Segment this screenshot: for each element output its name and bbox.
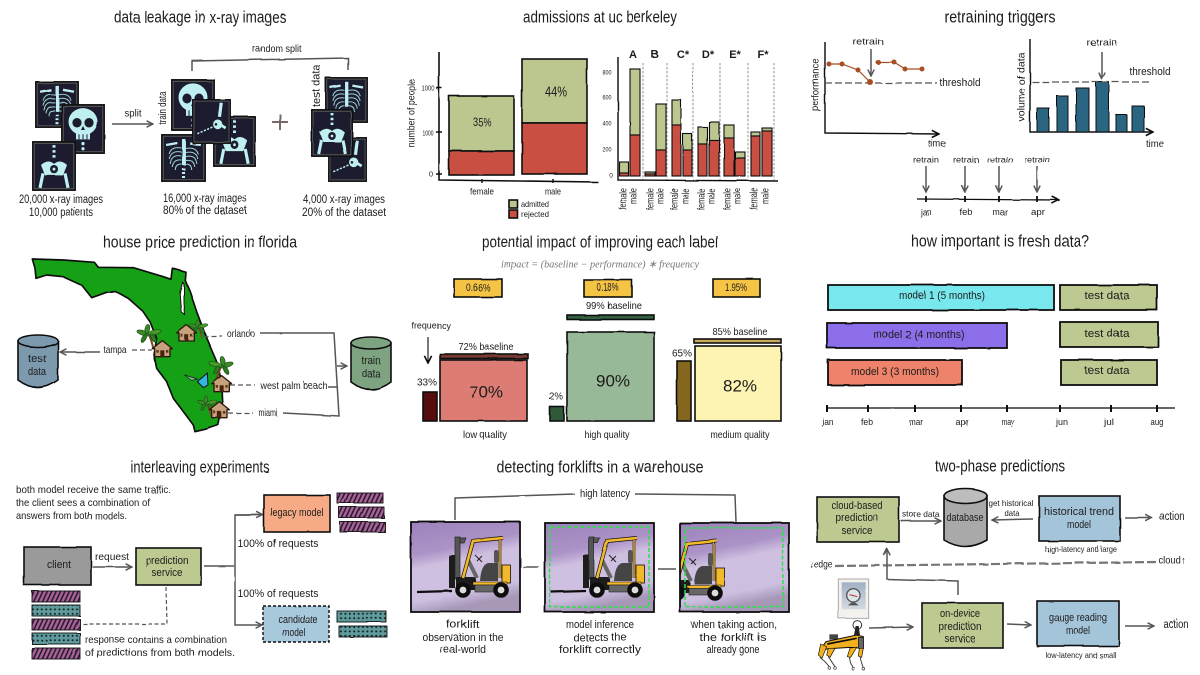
bracket: high latency — [455, 488, 736, 522]
caption: action: the forklift is — [700, 632, 767, 644]
divider: edge and cloud: cloud↑ — [1158, 556, 1186, 566]
chart: overall admissions: number of people — [406, 78, 418, 148]
bracket: random split: random split — [252, 43, 302, 55]
arrows to models — [204, 515, 263, 625]
timeline: scheduled retraining: retrain — [913, 156, 939, 164]
frame: model inference — [545, 523, 654, 612]
label: requests upper: 100% of requests — [238, 538, 319, 550]
cylinder: test data — [18, 335, 58, 388]
box: on-device service: service — [944, 633, 976, 645]
bar: model 3 — [828, 360, 962, 385]
group: medium quality: 1.95% — [725, 282, 747, 294]
cylinder: database: database — [946, 512, 984, 524]
panel: retraining triggers — [810, 8, 1170, 217]
group: low quality: low quality — [463, 429, 508, 441]
chart: data volume threshold: time — [1146, 138, 1164, 150]
label: train data: train data — [157, 91, 169, 124]
timeline: scheduled retraining: retrain — [953, 156, 979, 164]
chart: performance threshold: threshold — [940, 77, 980, 89]
caption: dataset size: 10,000 patients — [29, 207, 93, 219]
box: legacy model — [264, 495, 330, 532]
response text — [85, 634, 235, 659]
caption: observation: forklift — [446, 619, 480, 631]
panel: how important is fresh data — [822, 232, 1175, 427]
divider: edge and cloud — [810, 556, 1186, 570]
box: cloud-based service: cloud-based — [832, 500, 882, 512]
chart: admissions per department: male — [760, 188, 772, 204]
description: the client sees a combination of — [16, 497, 150, 509]
bar: test data 3: test data — [1084, 365, 1130, 377]
chart: overall admissions: female — [470, 186, 494, 198]
chart: admissions per department: male — [680, 188, 692, 204]
panel: admissions at uc berkeley — [406, 8, 778, 219]
chart: overall admissions: 0 — [429, 170, 433, 178]
title: forklifts: detecting forklifts in a warehouse — [496, 458, 704, 476]
chart: admissions per department: 200 — [602, 146, 612, 154]
timeline: months: jun — [1055, 417, 1068, 427]
bar: model 1: model 1 (5 months) — [899, 290, 985, 302]
chart: overall admissions: male — [545, 186, 561, 198]
legend: rejected — [521, 209, 549, 219]
title: house price: house price prediction in florida — [103, 232, 297, 252]
chart: performance threshold: retrain — [852, 36, 884, 48]
timeline: scheduled retraining: mar — [992, 207, 1008, 217]
group: high quality: 90% — [596, 372, 630, 390]
chart: admissions per department: male — [732, 188, 744, 204]
caption: test size — [302, 194, 387, 219]
title: admissions: admissions at uc berkeley — [523, 8, 677, 26]
cylinder: train data — [351, 337, 391, 390]
arrow: request — [93, 551, 132, 567]
arrow: split: split — [124, 108, 142, 120]
arrow: action lower — [1125, 619, 1188, 631]
panel: potential impact of improving each label — [412, 232, 781, 441]
frame: forklift gone — [678, 522, 790, 614]
arrow: service to gauge model — [1007, 624, 1031, 625]
chart: data volume threshold: retrain — [1086, 38, 1118, 48]
group: high quality: high quality — [584, 429, 630, 441]
timeline: scheduled retraining: retrain — [987, 156, 1013, 164]
box: gauge reading model — [1037, 601, 1119, 646]
description: both model receive the same traffic. — [16, 484, 171, 496]
timeline: scheduled retraining: feb — [960, 207, 972, 217]
chart: admissions per department: female — [670, 188, 680, 210]
box: historical trend model: historical trend — [1044, 506, 1114, 518]
chart: admissions per department: 800 — [602, 70, 612, 76]
chart: admissions per department: D* — [702, 49, 715, 61]
box: candidate model — [263, 606, 329, 642]
group: low quality: 72% baseline — [458, 341, 514, 353]
description — [16, 484, 171, 522]
combined predictions — [32, 591, 80, 659]
arrow: action upper: action — [1160, 511, 1184, 523]
caption: inference — [559, 619, 642, 656]
caption: low-latency: low-latency and small — [1046, 650, 1117, 660]
chart: performance threshold: time — [928, 138, 946, 150]
chart: admissions per department: F* — [758, 49, 769, 61]
chart: admissions per department: 600 — [602, 94, 612, 102]
timeline: months: jan — [822, 417, 834, 427]
cylinder: test data: test — [28, 353, 46, 365]
legend — [509, 199, 549, 219]
title: retraining triggers: retraining triggers — [944, 8, 1056, 26]
caption: inference: forklift correctly — [559, 644, 642, 656]
group: medium quality: medium quality — [710, 429, 770, 441]
panel: data leakage in x-ray images — [19, 8, 387, 219]
box: cloud-based service: service — [842, 525, 872, 537]
formula: impact = (baseline − performance) ∗ frequency — [501, 260, 699, 270]
candidate predictions — [337, 611, 387, 637]
chart: admissions per department: female — [750, 188, 760, 210]
timeline: scheduled retraining: apr — [1031, 207, 1045, 217]
arrow: get historical data: data — [1004, 508, 1020, 518]
panel: interleaving experiments — [16, 458, 387, 659]
box: gauge reading model: model — [1066, 625, 1090, 637]
cylinder: test data: data — [28, 366, 47, 378]
timeline: scheduled retraining: retrain — [1024, 156, 1050, 164]
chart: admissions per department: male — [628, 188, 640, 204]
label: miami — [228, 407, 278, 419]
caption: train size — [163, 193, 248, 217]
chart: overall admissions: 1000 — [422, 128, 434, 138]
divider: edge and cloud: ↓edge — [810, 560, 833, 570]
group: high quality: 99% baseline — [586, 300, 642, 312]
group: low quality: 33% — [417, 378, 437, 388]
chart: performance threshold: performance — [810, 58, 822, 112]
caption: observation: real-world — [440, 644, 486, 656]
caption: action — [690, 619, 777, 656]
chart: admissions per department: female — [618, 188, 630, 210]
bar: test data 1 — [1060, 285, 1157, 310]
box: client: client — [47, 559, 71, 571]
bar: model 2: model 2 (4 months) — [874, 329, 964, 341]
box: legacy model: legacy model — [270, 507, 324, 519]
chart: admissions per department: male — [706, 188, 718, 204]
timeline: months: may — [1002, 417, 1015, 427]
caption: test size: 20% of the dataset — [302, 207, 387, 219]
caption: action: when taking action, — [690, 619, 777, 631]
box: cloud-based service: prediction — [836, 512, 878, 524]
group: high quality: 2% — [549, 392, 563, 402]
caption: train size: 80% of the dataset — [163, 205, 248, 217]
icon: full dataset x-rays — [33, 82, 104, 190]
chart: admissions per department: female — [722, 188, 734, 210]
box: prediction service: prediction — [146, 555, 188, 567]
cylinder: train data: data — [362, 368, 381, 380]
panel: house price prediction in florida — [18, 232, 391, 432]
group: low quality: 70% — [469, 382, 503, 402]
timeline: scheduled retraining — [913, 156, 1059, 217]
caption: high-latency: high-latency and large — [1045, 544, 1117, 554]
caption: train size: 16,000 x-ray images — [163, 193, 247, 205]
title: fresh data: how important is fresh data? — [911, 232, 1089, 250]
timeline: scheduled retraining: jan — [920, 207, 932, 217]
arrow: edge to cloud — [887, 549, 958, 595]
box: on-device service: prediction — [938, 621, 982, 633]
icon: robot dog — [818, 621, 865, 670]
map: florida with houses — [32, 259, 234, 432]
icon: test x-rays — [312, 78, 367, 181]
connectors between frames — [523, 567, 676, 569]
arrow: robot to service — [869, 627, 913, 628]
box: prediction service: service — [152, 567, 182, 579]
box: historical trend model: model — [1067, 519, 1091, 531]
group: medium quality: 82% — [723, 376, 757, 396]
box: prediction service — [136, 548, 201, 585]
plus sign — [272, 114, 288, 130]
timeline: months: jul — [1103, 417, 1114, 427]
legacy predictions — [337, 493, 385, 532]
chart: admissions per department: female — [696, 188, 708, 210]
cylinder: train data: train — [362, 355, 380, 367]
caption: observation — [422, 619, 504, 656]
caption: inference: model inference — [566, 619, 634, 631]
timeline: months: apr — [956, 417, 968, 427]
bar: model 1 — [828, 285, 1054, 310]
box: client — [24, 547, 91, 585]
response text: response contains a combination — [85, 634, 227, 646]
chart: data volume threshold: threshold — [1130, 66, 1170, 78]
caption: action: already gone — [706, 644, 760, 656]
label: west palm beach: west palm beach — [260, 380, 328, 392]
box: gauge reading model: gauge reading — [1049, 612, 1107, 624]
icon: gauge photo — [838, 579, 869, 618]
frame: forklift observed — [411, 522, 520, 612]
chart: admissions per department: B — [651, 49, 659, 61]
chart: overall admissions: 35% — [473, 115, 491, 129]
chart: performance threshold — [810, 36, 980, 150]
bar: test data 2: test data — [1084, 328, 1130, 340]
bracket: random split — [192, 43, 348, 71]
chart: admissions per department: male — [656, 188, 666, 204]
group: high quality — [549, 280, 654, 441]
group: medium quality: 65% — [672, 348, 692, 360]
group: low quality — [412, 279, 528, 441]
box: candidate model: candidate — [278, 614, 318, 626]
label: test data: test data — [311, 64, 323, 107]
label: orlando: orlando — [227, 328, 255, 340]
box: on-device service: on-device — [940, 608, 980, 620]
caption: dataset size — [19, 194, 103, 219]
label: orlando — [203, 328, 255, 340]
response text: of predictions from both models. — [85, 647, 235, 659]
group: high quality: 0.18% — [597, 282, 619, 294]
group: low quality: 0.66% — [466, 282, 490, 294]
title: data leakage: data leakage in x-ray images — [114, 8, 286, 26]
box: cloud-based service — [817, 497, 899, 542]
chart: admissions per department — [602, 49, 778, 210]
chart: data volume threshold: volume of data — [1016, 52, 1028, 122]
icon: train x-rays — [162, 80, 255, 181]
chart: overall admissions: 1000 — [422, 84, 434, 92]
title: two-phase: two-phase predictions — [935, 456, 1065, 476]
legend: admitted — [521, 199, 549, 209]
chart: overall admissions: 44% — [545, 84, 567, 100]
chart: admissions per department: 0 — [609, 172, 613, 180]
timeline: months — [822, 405, 1175, 427]
caption: dataset size: 20,000 x-ray images — [19, 194, 103, 206]
label: west palm beach — [230, 380, 328, 392]
chart: admissions per department: 400 — [602, 120, 612, 128]
chart: overall admissions — [406, 52, 598, 198]
bar: test data 2 — [1060, 322, 1158, 347]
box: historical trend model — [1039, 496, 1120, 541]
bar: model 2 — [827, 323, 1007, 348]
box: on-device service — [922, 603, 1003, 648]
chart: admissions per department: female — [646, 188, 656, 210]
dashed response path — [83, 587, 167, 624]
timeline: months: mar — [909, 417, 923, 427]
chart: admissions per department: C* — [677, 49, 690, 61]
panel: detecting forklifts in a warehouse — [411, 458, 789, 656]
timeline: months: feb — [861, 417, 873, 427]
chart: admissions per department: A — [629, 49, 637, 61]
title: interleaving: interleaving experiments — [130, 458, 270, 476]
group: low quality: frequency — [412, 320, 451, 332]
title: potential impact: potential impact of improving each label — [482, 232, 718, 252]
bar: model 3: model 3 (3 months) — [851, 366, 939, 378]
bracket: high latency: high latency — [580, 488, 630, 500]
label: requests lower: 100% of requests — [238, 588, 319, 600]
chart: data volume threshold — [1016, 38, 1170, 150]
bar: test data 3 — [1061, 360, 1157, 385]
bar: test data 1: test data — [1084, 290, 1130, 302]
label and arrow: tampa — [60, 344, 152, 356]
arrow: split — [112, 108, 153, 124]
label and arrow: tampa: tampa — [104, 344, 127, 356]
cylinder: database — [944, 488, 987, 546]
panel: two-phase predictions — [810, 456, 1188, 670]
box: candidate model: model — [282, 627, 306, 639]
caption: test size: 4,000 x-ray images — [303, 194, 385, 206]
connector to train data — [260, 333, 347, 416]
arrow: get historical data — [988, 498, 1034, 520]
arrow: action lower: action — [1164, 619, 1188, 631]
caption: observation: observation in the — [422, 632, 504, 644]
group: medium quality: 85% baseline — [712, 326, 768, 338]
arrow: request: request — [95, 551, 129, 563]
description: answers from both models. — [16, 510, 127, 522]
arrow: action upper — [1125, 511, 1184, 523]
chart: admissions per department: E* — [729, 49, 742, 61]
caption: inference: detects the — [573, 632, 627, 644]
arrow: store data: store data — [902, 509, 940, 519]
arrow: get historical data: get historical — [988, 498, 1034, 508]
timeline: months: aug — [1150, 417, 1164, 427]
group: medium quality — [672, 279, 781, 441]
label: miami: miami — [258, 407, 278, 419]
